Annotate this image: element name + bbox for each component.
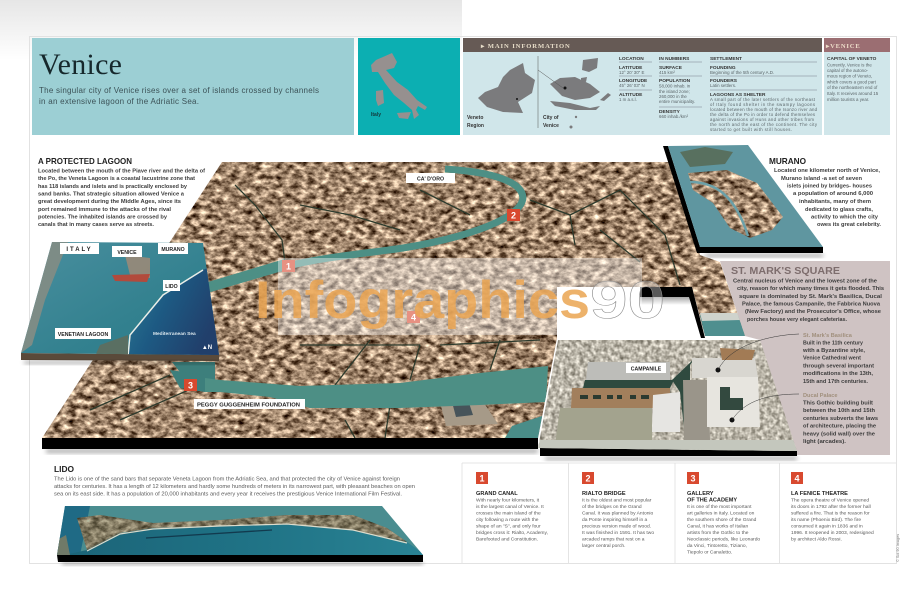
label: Murano xyxy=(158,243,188,254)
column: location: LONGITUDE xyxy=(619,78,648,84)
text: capital of Veneto: of the northeastern end of xyxy=(827,85,878,90)
text: St. Mark's Basilica: modifications in the 13th, xyxy=(803,371,873,377)
text: St. Mark's Basilica: St. Mark's Basilica xyxy=(803,333,853,339)
column: settlement: FOUNDING xyxy=(710,65,736,71)
item 4: La Fenice Theatre: LA FENICE THEATRE xyxy=(791,491,848,497)
column: in numbers: 260,000 in the xyxy=(659,94,687,99)
text: capital of Veneto: CAPITAL OF VENETO xyxy=(827,56,877,62)
text: capital of Veneto: mous region of Veneto, xyxy=(827,74,872,78)
item 3: Gallery of the Academy: art galleries in Italy. Located on xyxy=(687,510,755,516)
item 2: Rialto Bridge: of the bridges on the Grand xyxy=(582,504,642,510)
item 2: Rialto Bridge: arcaded ramps that rest on a xyxy=(582,536,645,542)
item 1: Grand Canal xyxy=(476,472,548,542)
text: a protected lagoon xyxy=(38,156,205,228)
map label: Ca' d'Oro: CA' D'ORO xyxy=(417,176,444,182)
inset: Lido island xyxy=(50,504,430,565)
panel: numbered places xyxy=(462,463,896,563)
text: Lido: LIDO xyxy=(54,464,74,474)
map: Veneto region: Region xyxy=(467,123,484,129)
watermark: 90 xyxy=(590,271,665,330)
item 4: La Fenice Theatre: 1996. It reopened in 2003, redesigned xyxy=(791,530,874,536)
column: settlement: against invasions of Huns and other tribes from xyxy=(710,117,814,122)
text: Murano: activity to which the city xyxy=(811,214,879,220)
text: Lido xyxy=(54,464,415,498)
text: Lido: attacks for centuries. It has a length of 12 kilometers and hardly some hundreds of meters in its narrowest part, with pleasant beaches on open xyxy=(54,484,415,490)
label: Venice: VENICE xyxy=(117,250,137,256)
text: St. Mark's Basilica: Venice Cathedral went xyxy=(803,356,861,362)
map: city of Venice: Venice xyxy=(543,123,559,129)
text: Ducal Palace: This Gothic building built xyxy=(803,400,873,406)
item 1: Grand Canal: 1 xyxy=(479,474,485,484)
callout dot: Ducal Palace xyxy=(730,394,799,422)
text: a protected lagoon: sand banks. That strategic situation allowed Venice a xyxy=(38,192,185,198)
column: settlement: of Italy found shelter in the swampy lagoons xyxy=(710,102,815,107)
map label: Peggy Guggenheim Foundation: PEGGY GUGGENHEIM FOUNDATION xyxy=(197,402,300,408)
column: in numbers: SURFACE xyxy=(659,65,683,71)
column: settlement: SETTLEMENT xyxy=(710,56,742,62)
text: Murano: a population of around 6,000 xyxy=(793,191,873,197)
text: Ducal Palace: between the 10th and 15th xyxy=(803,408,876,414)
inset: Murano island xyxy=(660,140,830,257)
subtitle: The singular city of Venice rises over a set of islands crossed by channels xyxy=(39,86,319,95)
item 1: Grand Canal: shape of an "S", and only four xyxy=(476,524,541,530)
map label: Peggy Guggenheim Foundation xyxy=(194,399,305,409)
text: a protected lagoon: has 118 islands and islets and is practically enclosed by xyxy=(38,184,188,190)
text: Ducal Palace: light (arcades). xyxy=(803,439,846,445)
label: Campanile xyxy=(626,363,666,373)
label: Italy: ITALY xyxy=(66,247,93,253)
marker 1 xyxy=(282,260,295,272)
text: St. Mark's Square: square is dominated by St. Mark's Basilica, Ducal xyxy=(739,294,882,300)
item 2: Rialto Bridge: da Ponte inspiring himself in a xyxy=(582,517,648,523)
column: location: LOCATION xyxy=(619,56,644,62)
item 2: Rialto Bridge: It was finished in 1591. It has two xyxy=(582,530,654,536)
text: Murano xyxy=(769,156,881,228)
text: Murano: owes its great celebrity. xyxy=(817,222,881,228)
heading: main information: ▸ MAIN INFORMATION xyxy=(480,43,571,50)
item 4: La Fenice Theatre: its doors in 1792 after the former hall xyxy=(791,504,871,510)
panel: Italy locator map xyxy=(358,38,460,135)
main 3D map of Venice xyxy=(20,160,750,453)
marker 2 xyxy=(507,209,520,221)
black edge of map cutout xyxy=(640,287,705,338)
column: settlement: FOUNDERS xyxy=(710,78,738,84)
lagoon corner water xyxy=(172,362,215,380)
item 3: Gallery of the Academy: OF THE ACADEMY xyxy=(687,498,737,504)
column: in numbers: 415 km² xyxy=(659,70,675,75)
text: capital of Veneto: capital of the autono- xyxy=(827,68,869,73)
item 2: Rialto Bridge: Canal. It was planned by Antonio xyxy=(582,510,654,516)
column: in numbers xyxy=(659,56,702,119)
item 2: Rialto Bridge: It is the oldest and most popular xyxy=(582,498,652,504)
marker 2: 2 xyxy=(511,210,516,220)
item 3: Gallery of the Academy: artists from the Gothic to the xyxy=(687,530,749,536)
panel: St. Mark's Square background xyxy=(720,261,890,455)
text: Murano: islets joined by bridges- houses xyxy=(787,184,872,190)
text: Ducal Palace: of architecture, placing the xyxy=(803,424,876,430)
item 3: Gallery of the Academy: the southern shore of the Grand xyxy=(687,517,757,523)
item 1: Grand Canal: is the largest canal of Venice. It xyxy=(476,504,544,510)
item 2: Rialto Bridge xyxy=(582,472,654,549)
column: location: 45° 26' 03" N xyxy=(619,83,645,88)
column: in numbers: IN NUMBERS xyxy=(659,56,690,62)
canal: Grand Canal xyxy=(205,169,523,290)
item 3: Gallery of the Academy: Neoclassic periods, like Leonardo xyxy=(687,536,760,542)
item 3: Gallery of the Academy: It is one of the most important xyxy=(687,504,752,510)
text: a protected lagoon: canals that in many cases serve as streets. xyxy=(38,222,154,228)
heading: Venice: ▸VENICE xyxy=(825,43,861,50)
marker 3 xyxy=(184,379,197,391)
column: location: ALTITUDE xyxy=(619,92,643,98)
map: city of Venice: City of xyxy=(543,115,559,121)
map label: Ca' d'Oro xyxy=(406,173,455,183)
subtitle: in an extensive lagoon of the Adriatic Sea. xyxy=(39,97,199,106)
icon: north arrow: ▲N xyxy=(202,345,212,351)
text: St. Mark's Square: porches house very elegant cafeterias. xyxy=(747,317,847,323)
text: St. Mark's Square: ST. MARK'S SQUARE xyxy=(731,265,840,277)
panel: title block xyxy=(32,38,354,135)
top-left page tint xyxy=(0,0,462,60)
label: Venetian lagoon: VENETIAN LAGOON xyxy=(58,332,108,338)
column: location xyxy=(619,56,652,102)
text: St. Mark's Square: Palace, the famous Campanile, the Fabbrica Nuova xyxy=(742,302,881,308)
item 3: Gallery of the Academy xyxy=(687,472,760,556)
text: Ducal Palace xyxy=(803,393,878,445)
item 1: Grand Canal: city following a route with the xyxy=(476,517,539,523)
column: settlement: started to get built with still houses. xyxy=(710,127,792,132)
inset: Venetian lagoon map xyxy=(20,240,220,364)
column: settlement: A small part of the later settlers of the northeast xyxy=(710,97,816,102)
column: in numbers: 660 inhab./km² xyxy=(659,114,689,119)
text: Murano: Located one kilometer north of Venice, xyxy=(774,168,880,174)
text: Lido: sea on its east side. It has a population of 20,000 inhabitants and every year it receives the prestigious Venice International Film Festival. xyxy=(54,492,402,498)
map: Veneto region xyxy=(467,63,535,129)
text: a protected lagoon: port remained immune to the attacks of the rival xyxy=(38,207,171,213)
label: Mediterranean Sea: Mediterranean Sea xyxy=(153,331,196,337)
column: settlement: LAGOONS AS SHELTER xyxy=(710,92,766,98)
icon: Italy silhouette xyxy=(371,53,427,119)
Salute complex xyxy=(441,404,498,426)
label: Venetian lagoon xyxy=(55,328,111,339)
text: a protected lagoon: great development during the Middle Ages, since its xyxy=(38,199,181,205)
inset: St. Mark's Square aerial xyxy=(535,334,800,460)
column: settlement: Beginning of the 5th century A.D. xyxy=(710,70,774,75)
item 3: Gallery of the Academy: 3 xyxy=(690,474,696,484)
item 4: La Fenice Theatre xyxy=(791,472,874,542)
item 3: Gallery of the Academy: da Vinci, Tintoretto, Tiziano, xyxy=(687,543,747,549)
canal: lower Grand Canal xyxy=(205,366,548,408)
label: Venice xyxy=(112,246,142,257)
text: Murano: dedicated to glass crafts, xyxy=(805,207,873,213)
item 3: Gallery of the Academy: Canal, it has works of Italian xyxy=(687,524,748,530)
column: location: LATITUDE xyxy=(619,65,643,71)
item 1: Grand Canal: Barefooted and Constitution. xyxy=(476,536,538,542)
label: Lido: LIDO xyxy=(165,284,178,290)
column: in numbers: DENSITY xyxy=(659,109,681,115)
item 2: Rialto Bridge: RIALTO BRIDGE xyxy=(582,491,626,497)
text: St. Mark's Square: (New Factory) and the Prosecutor's Office, whose xyxy=(745,309,881,315)
text: St. Mark's Square: city, reason for which many times it gets flooded. This xyxy=(737,286,884,292)
column: in numbers: entire municipality. xyxy=(659,99,695,104)
map: city of Venice xyxy=(538,58,611,129)
label: Italy xyxy=(60,243,99,254)
title: Venice xyxy=(39,48,122,81)
text: St. Mark's Basilica: through several important xyxy=(803,364,874,370)
marker 1: 1 xyxy=(286,262,291,272)
text: a protected lagoon: potencies. The inhabited islands are crossed by xyxy=(38,214,168,220)
text: capital of Veneto: Currently, Venice is the xyxy=(827,62,872,68)
text: Ducal Palace: centuries subverts the laws xyxy=(803,416,878,422)
column: location: 1 m a.s.l. xyxy=(619,97,637,102)
text: Murano: MURANO xyxy=(769,156,806,166)
text: St. Mark's Square xyxy=(731,265,884,323)
text: St. Mark's Basilica: 15th and 17th centuries. xyxy=(803,379,868,385)
item 1: Grand Canal: With nearly four kilometers, it xyxy=(476,498,540,504)
text: a protected lagoon: the Po, the Veneta Lagoon is a coastal lacustrine zone that xyxy=(38,176,195,182)
text: St. Mark's Basilica: with a Byzantine style, xyxy=(802,348,865,354)
column: settlement xyxy=(710,56,818,132)
column: settlement: the north and the east of the continent. The city xyxy=(710,122,818,127)
text: St. Mark's Basilica: Built in the 11th century xyxy=(803,340,864,346)
callout dot: St. Mark's Basilica xyxy=(716,334,799,372)
label: Murano: MURANO xyxy=(161,247,185,253)
column: location: 12° 20' 30" E xyxy=(619,70,644,75)
text: Murano: Murano island -a set of seven xyxy=(781,176,863,182)
column: in numbers: 58,000 inhab. in xyxy=(659,84,691,88)
item 3: Gallery of the Academy: GALLERY xyxy=(687,491,714,497)
column: in numbers: the island zone; xyxy=(659,89,690,94)
label: Lido xyxy=(163,280,180,291)
text: capital of Veneto: Italy. It receives around 15 xyxy=(827,91,879,96)
column: settlement: Latin settlers. xyxy=(710,83,736,88)
item 2: Rialto Bridge: larger central porch. xyxy=(582,543,626,549)
marker 4: 4 xyxy=(411,312,416,322)
small canals xyxy=(90,185,680,438)
text: Ducal Palace: heavy (solid wall) over the xyxy=(803,432,875,438)
text: Ducal Palace: Ducal Palace xyxy=(803,393,838,399)
column: settlement: the delta of the Po in order to defend themselves xyxy=(710,112,815,117)
item 4: La Fenice Theatre: suffered a fire. That is the reason for xyxy=(791,510,870,516)
text: a protected lagoon: A PROTECTED LAGOON xyxy=(38,156,132,166)
item 4: La Fenice Theatre: 4 xyxy=(794,474,800,484)
item 4: La Fenice Theatre: The opera theatre of Venice opened xyxy=(791,498,869,504)
label: Campanile: CAMPANILE xyxy=(631,366,662,372)
text: Lido: The Lido is one of the sand bars that separate Veneta Lagoon from the Adriatic Sea, and that protected the city of Venice against foreign xyxy=(54,476,400,482)
map: Veneto region: Veneto xyxy=(467,115,483,121)
panel: Venice sidebar xyxy=(824,38,890,135)
watermark: Infographics xyxy=(255,271,590,330)
column: in numbers: POPULATION xyxy=(659,78,691,84)
item 2: Rialto Bridge: precious version made of wood. xyxy=(582,524,651,530)
marker 3: 3 xyxy=(188,380,193,390)
text: capital of Veneto: million tourists a year. xyxy=(827,97,869,102)
text: a protected lagoon: Located between the mouth of the Piave river and the delta of xyxy=(38,168,205,174)
image credit: © Sol 90 Images xyxy=(896,534,900,562)
text: St. Mark's Square: Central nucleus of Venice and the lowest zone of the xyxy=(733,278,877,284)
item 4: La Fenice Theatre: its name (Phoenix Bird). The fire xyxy=(791,517,861,523)
text: Murano: inhabitants, many of them xyxy=(799,199,871,205)
text: capital of Veneto: which covers a good part xyxy=(827,80,877,84)
item 1: Grand Canal: crosses the main island of the xyxy=(476,510,541,516)
column: settlement: located between the mouth of the Isonzo river and xyxy=(710,107,818,112)
label: Italy: Italy xyxy=(371,112,381,118)
text: St. Mark's Basilica xyxy=(802,333,874,385)
item 4: La Fenice Theatre: consumed it again in 1836 and in xyxy=(791,524,863,530)
item 1: Grand Canal: bridges cross it: Rialto, Academy, xyxy=(476,530,548,536)
watermark xyxy=(255,258,665,335)
panel: main information xyxy=(463,38,822,135)
item 4: La Fenice Theatre: by architect Aldo Rossi. xyxy=(791,536,842,542)
item 1: Grand Canal: GRAND CANAL xyxy=(476,491,518,497)
marker 4 xyxy=(407,311,420,323)
item 3: Gallery of the Academy: Tiepolo or Canaletto. xyxy=(687,550,732,556)
item 2: Rialto Bridge: 2 xyxy=(585,474,591,484)
